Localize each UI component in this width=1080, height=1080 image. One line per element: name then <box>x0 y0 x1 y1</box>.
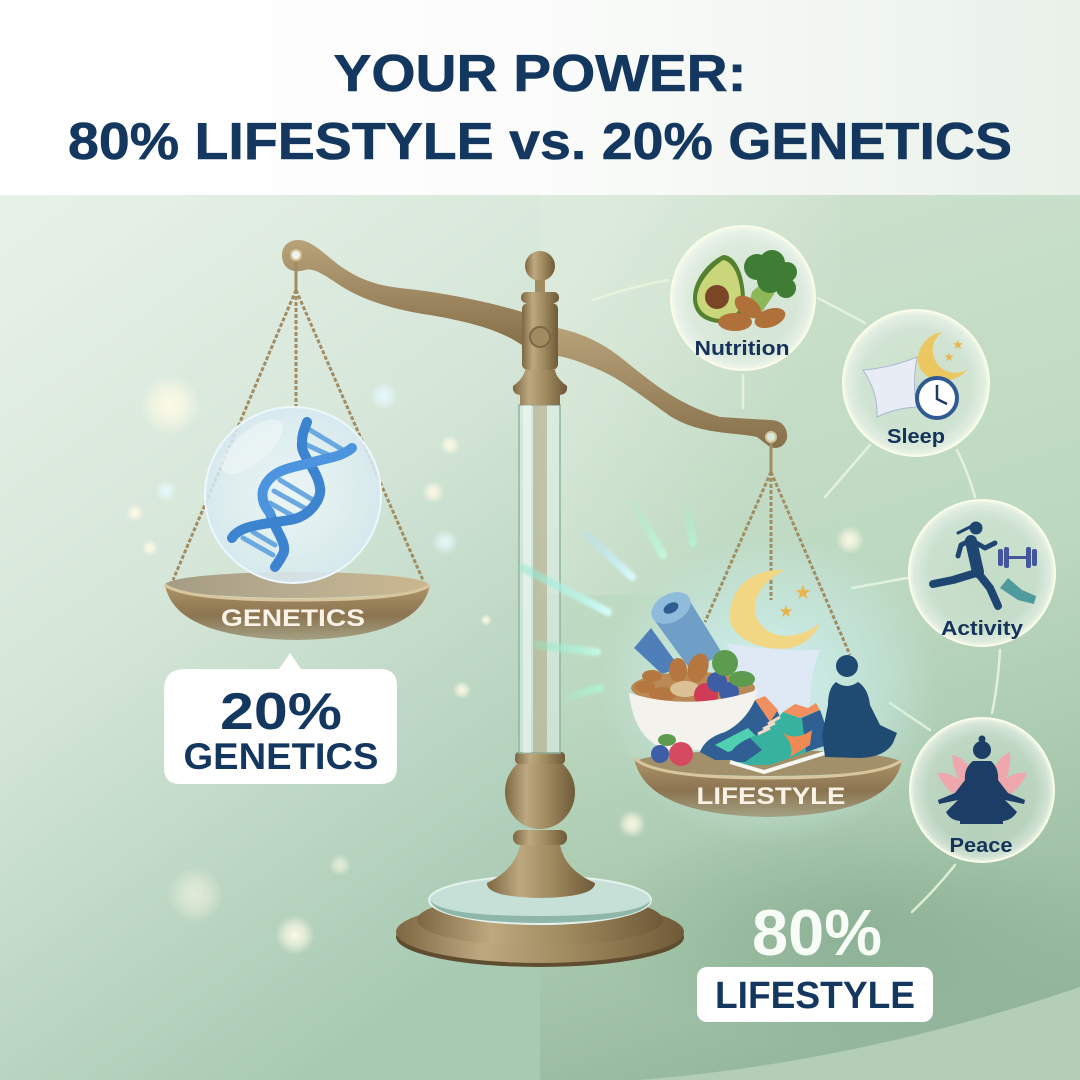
scale: base <box>396 752 684 967</box>
bubble: activity <box>909 500 1055 646</box>
icon: sneaker <box>1000 578 1036 604</box>
icon: stars: ★ <box>952 337 964 352</box>
icon: stars <box>944 337 964 364</box>
icon: broccoli <box>744 250 797 312</box>
bubble: sleep <box>843 310 989 456</box>
icon: meditating person <box>938 736 1025 824</box>
lifestyle items <box>629 570 897 772</box>
title <box>68 45 1012 171</box>
icon: pillow <box>727 643 820 712</box>
title: YOUR POWER: <box>334 45 746 103</box>
right pan <box>634 758 902 817</box>
pan label: genetics: GENETICS <box>221 605 365 632</box>
icon: moon and stars: ★ <box>778 602 794 621</box>
scale: glass column <box>519 405 560 753</box>
bubble: peace <box>910 718 1054 862</box>
pan label: lifestyle: LIFESTYLE <box>696 783 846 810</box>
icon: sneakers <box>700 696 828 772</box>
right pan glow <box>600 535 940 845</box>
icon: bowl of nuts <box>629 650 757 750</box>
icon: DNA bubble <box>205 407 381 583</box>
icon: lotus <box>937 752 1027 800</box>
right chains <box>705 443 850 655</box>
motion rays <box>523 503 693 697</box>
title: 80% LIFESTYLE vs. 20% GENETICS <box>68 113 1012 171</box>
bubble: nutrition: Nutrition <box>694 338 790 360</box>
icon: almonds <box>718 291 788 332</box>
icon: pillow <box>863 357 917 417</box>
left chains <box>173 262 423 580</box>
left pan <box>165 585 430 640</box>
stat: 80% lifestyle: LIFESTYLE <box>715 975 915 1017</box>
left pan back <box>165 572 429 598</box>
icon: runner <box>933 523 998 606</box>
header band <box>0 0 1080 195</box>
icon: avocado <box>693 255 745 323</box>
stat: 80% lifestyle: 80% <box>752 896 882 969</box>
icon: stars: ★ <box>944 350 954 364</box>
icon: dumbbell <box>998 547 1037 568</box>
bubble: peace: Peace <box>950 835 1012 857</box>
bubble: sleep: Sleep <box>887 426 945 448</box>
glowing particles <box>126 375 864 955</box>
icon: crescent moon <box>918 332 967 381</box>
scale: beam and top <box>282 240 787 448</box>
callout: 20% genetics: 20% <box>220 683 342 741</box>
label pill <box>697 967 933 1022</box>
icon: moon and stars <box>730 570 820 649</box>
right pan back <box>635 750 901 776</box>
bubble: nutrition <box>671 226 815 370</box>
icon: yoga mat <box>634 586 722 674</box>
callout: 20% genetics: GENETICS <box>184 736 378 777</box>
callout: 20% genetics <box>164 653 397 784</box>
icon: moon and stars: ★ <box>794 582 812 604</box>
connector lines between bubbles <box>593 280 1000 912</box>
icon: front berries <box>651 734 693 766</box>
icon: clock <box>917 378 957 418</box>
icon: meditation figure <box>822 655 897 758</box>
bubble: activity: Activity <box>941 618 1024 640</box>
stat: 80% lifestyle <box>697 896 933 1022</box>
